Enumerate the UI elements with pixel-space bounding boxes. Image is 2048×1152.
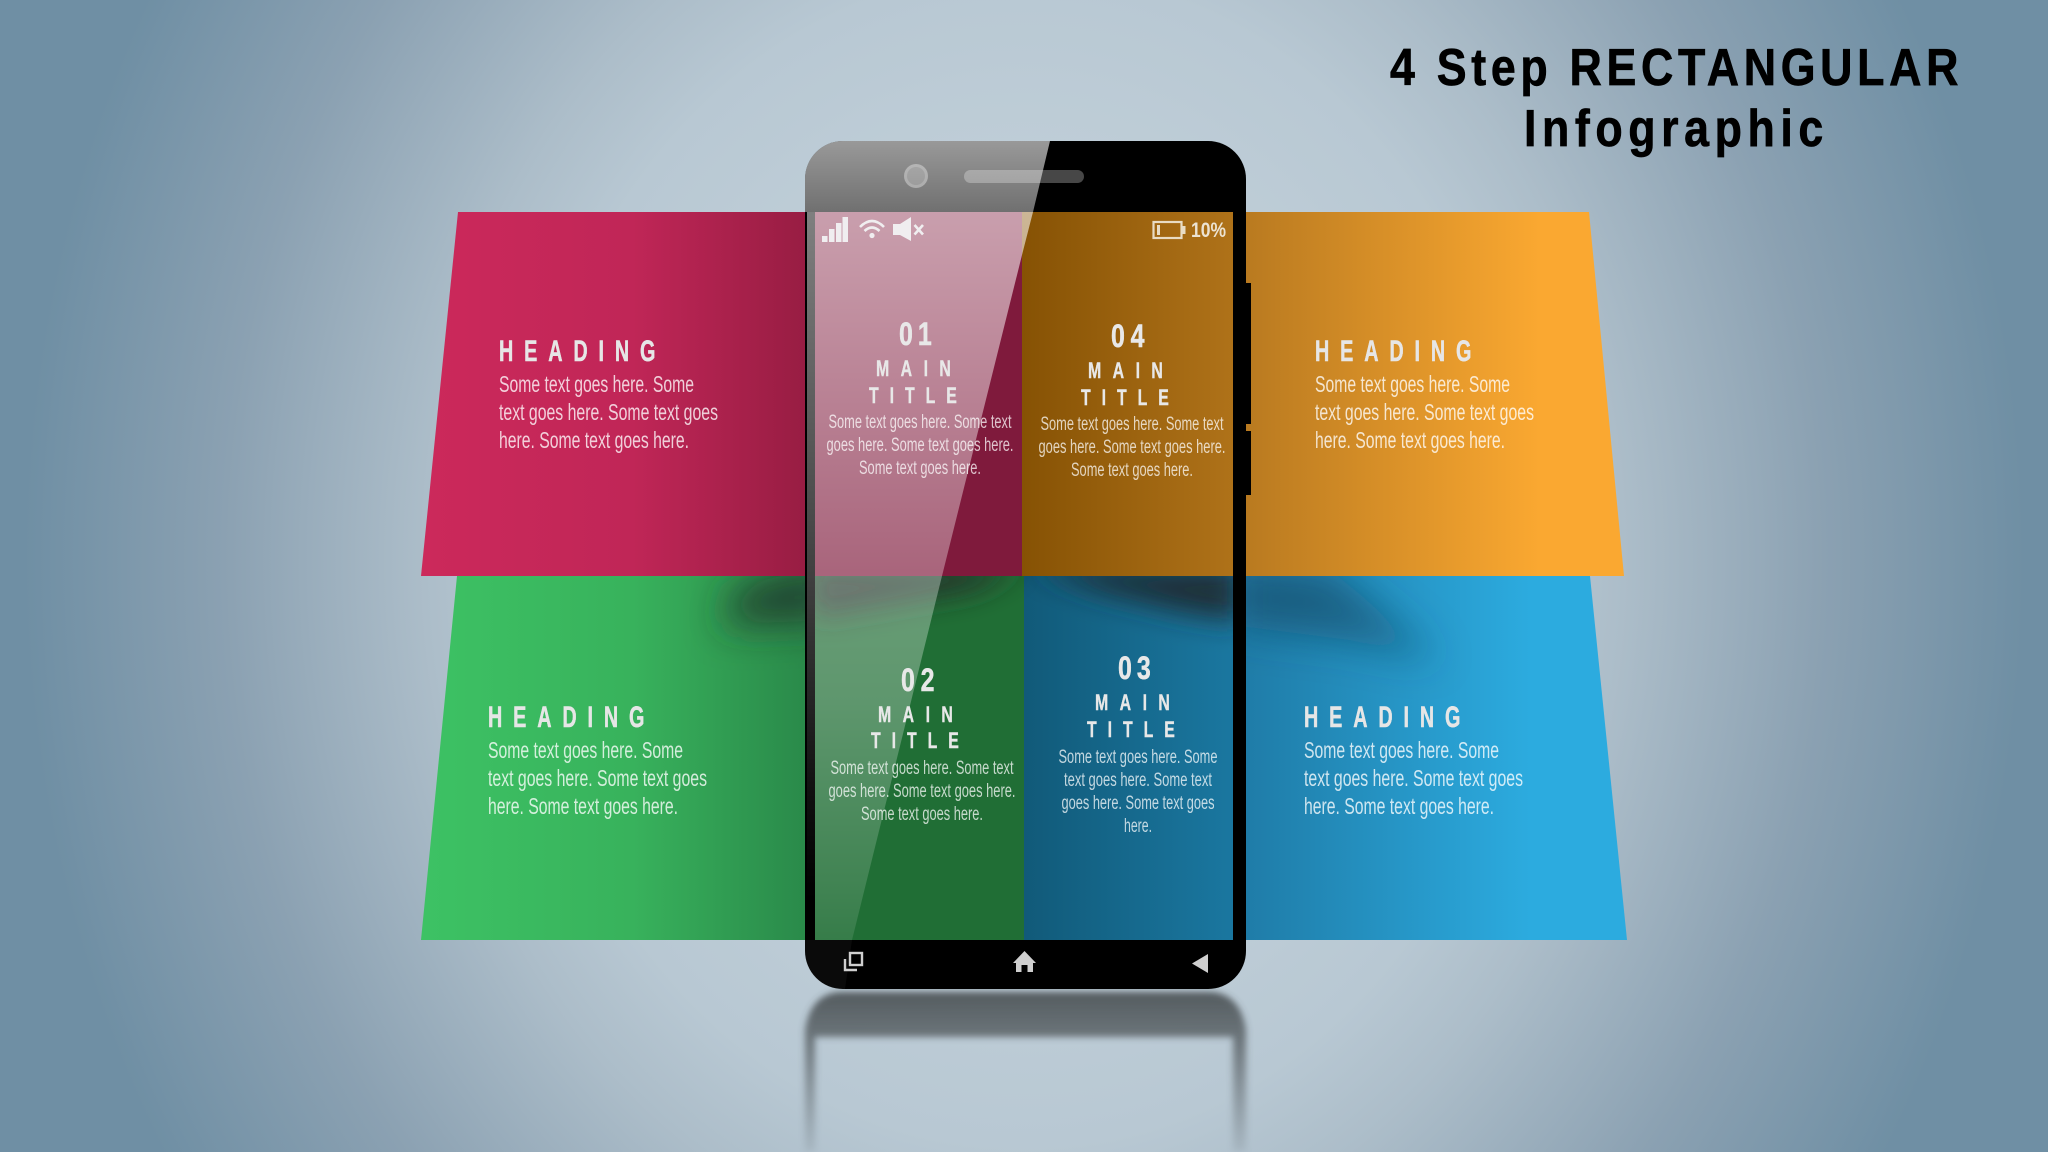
glass reflection: [800, 141, 1050, 989]
body text 01: [826, 412, 1014, 479]
main title 02: MAIN: [878, 704, 953, 728]
status icons: [822, 217, 1226, 242]
screen quadrant: orange: [1022, 212, 1233, 576]
number 03: 03: [1118, 651, 1151, 687]
panel: blue right: [1233, 565, 1627, 940]
body text: red: Some text goes here. Some: [499, 371, 694, 397]
panel: green left: [421, 565, 830, 940]
main title 02: [871, 704, 959, 754]
title: Infographic: [1524, 100, 1823, 158]
body text: orange: here. Some text goes here.: [1315, 427, 1505, 453]
body text 04: goes here. Some text goes here.: [1038, 437, 1226, 458]
number 01: 01: [899, 317, 932, 353]
title: [1390, 39, 1958, 158]
body text 02: [828, 758, 1016, 825]
screen quadrant: blue: [1024, 576, 1233, 940]
body text 02: Some text goes here.: [861, 804, 983, 825]
body text: green: Some text goes here. Some: [488, 737, 683, 763]
screen quadrant: red: [815, 212, 1022, 576]
shadow on blue panel: [1233, 565, 1440, 660]
body text 02: goes here. Some text goes here.: [828, 781, 1016, 802]
body text: blue: Some text goes here. Some: [1304, 737, 1499, 763]
battery percent: 10%: [1191, 219, 1226, 242]
heading: green: HEADING: [488, 701, 644, 734]
heading: orange: HEADING: [1315, 335, 1471, 368]
navigation icons: [845, 951, 1208, 973]
icon: home: [1013, 951, 1036, 972]
phone side buttons: [1244, 283, 1251, 495]
body text: blue: here. Some text goes here.: [1304, 793, 1494, 819]
body text 03: text goes here. Some text: [1064, 770, 1212, 791]
body text: red: [499, 371, 718, 453]
main title 02: TITLE: [871, 730, 959, 754]
main title 03: MAIN: [1095, 692, 1170, 716]
body text 04: Some text goes here. Some text: [1040, 414, 1224, 435]
title: 4 Step RECTANGULAR: [1390, 39, 1958, 97]
icon: battery: [1154, 222, 1186, 238]
main title 01: [869, 358, 957, 409]
icon: recents: [845, 953, 862, 970]
panel: orange right: [1240, 212, 1624, 576]
phone: [800, 141, 1251, 989]
step 02: [828, 663, 1016, 825]
screen shadow: [805, 566, 1240, 622]
heading: red: HEADING: [499, 335, 655, 368]
body text 01: goes here. Some text goes here.: [826, 435, 1014, 456]
body text 03: goes here. Some text goes: [1062, 793, 1214, 814]
body text: green: text goes here. Some text goes: [488, 765, 707, 791]
body text: orange: text goes here. Some text goes: [1315, 399, 1534, 425]
body text 01: Some text goes here.: [859, 458, 981, 479]
screen quadrant: green: [815, 576, 1024, 940]
body text: blue: text goes here. Some text goes: [1304, 765, 1523, 791]
speaker: [964, 170, 1084, 183]
body text 04: Some text goes here.: [1071, 460, 1193, 481]
body text: green: [488, 737, 707, 819]
main title 01: TITLE: [869, 385, 957, 409]
body text 03: [1058, 747, 1218, 837]
panel: red left: [421, 212, 810, 576]
body text 03: here.: [1124, 816, 1152, 837]
body text: green: here. Some text goes here.: [488, 793, 678, 819]
body text 01: Some text goes here. Some text: [828, 412, 1012, 433]
body text: orange: [1315, 371, 1534, 453]
number 04: 04: [1111, 319, 1145, 355]
main title 03: TITLE: [1087, 719, 1175, 743]
body text 02: Some text goes here. Some text: [830, 758, 1014, 779]
step 01: [826, 317, 1014, 479]
main title 04: [1081, 360, 1169, 411]
body text: red: here. Some text goes here.: [499, 427, 689, 453]
main title 01: MAIN: [876, 358, 951, 382]
body text: red: text goes here. Some text goes: [499, 399, 718, 425]
main title 04: MAIN: [1088, 360, 1163, 384]
body text: orange: Some text goes here. Some: [1315, 371, 1510, 397]
number 02: 02: [901, 663, 935, 699]
body text 04: [1038, 414, 1226, 481]
main title 03: [1087, 692, 1175, 743]
step 04: [1038, 319, 1226, 481]
shadow on green panel: [720, 565, 830, 625]
body text: blue: [1304, 737, 1523, 819]
icon: muted speaker: [893, 217, 923, 241]
main title 04: TITLE: [1081, 387, 1169, 411]
icon: back: [1192, 954, 1208, 973]
heading: blue: HEADING: [1304, 701, 1460, 734]
step 03: [1058, 651, 1218, 837]
icon: signal: [822, 217, 848, 242]
phone reflection: [805, 992, 1246, 1152]
camera: [904, 164, 928, 188]
body text 03: Some text goes here. Some: [1058, 747, 1218, 768]
phone body: [805, 141, 1246, 989]
icon: wifi: [860, 221, 884, 237]
